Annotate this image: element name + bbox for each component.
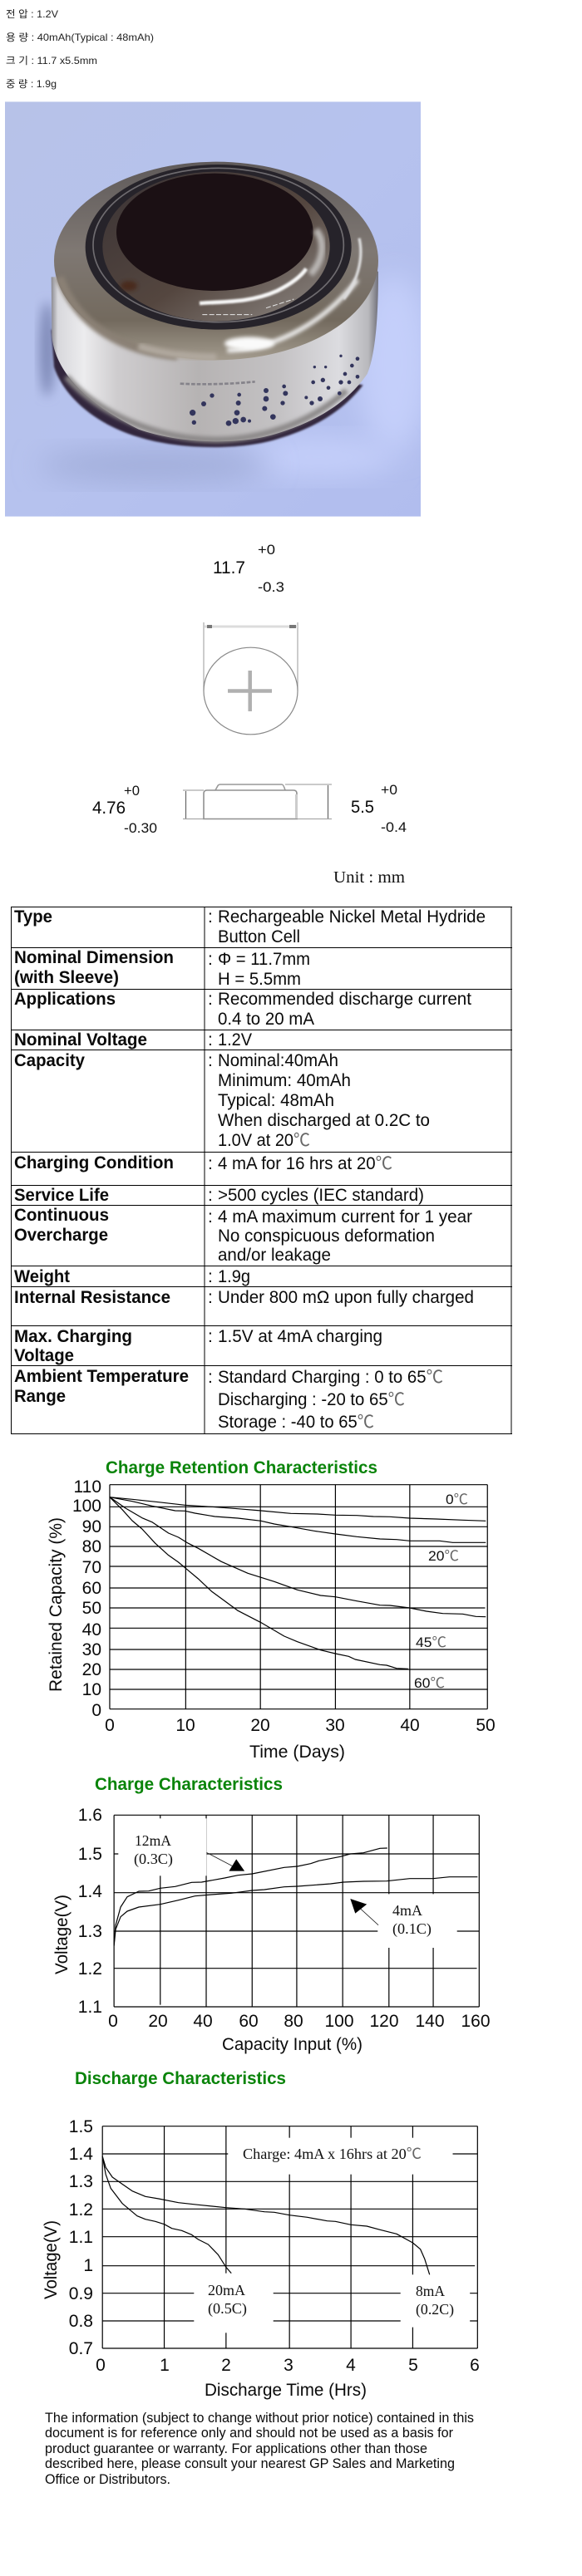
curve label: 8mA: (0.2C) — [416, 2301, 454, 2318]
drawing: side view — [183, 784, 332, 819]
curve label: 12mA: 12mA — [135, 1832, 171, 1849]
curve label: 4mA — [392, 1902, 432, 1938]
y axis ticks — [72, 1477, 101, 1720]
y axis ticks: 40 — [82, 1620, 101, 1639]
spec: weight: 중 량 : 1.9g — [6, 78, 57, 90]
row: applications: : — [208, 990, 213, 1009]
y axis ticks: 0.9 — [69, 2284, 93, 2303]
x axis ticks: 0 — [96, 2356, 106, 2375]
heading: charge characteristics: Charge Characteristics — [95, 1775, 283, 1794]
curve labels: 60℃ — [414, 1675, 445, 1691]
row: applications: Recommended discharge current — [218, 990, 471, 1009]
disclaimer text: The information (subject to change without prior notice) contained in this — [45, 2410, 474, 2426]
curve label: 4mA: 4mA — [392, 1902, 422, 1919]
y axis ticks — [78, 1806, 102, 2017]
text block: key specifications — [6, 8, 154, 90]
row: capacity: : — [208, 1051, 213, 1070]
y axis ticks: 1.1 — [69, 2228, 93, 2247]
row: capacity: Minimum: 40mAh — [218, 1071, 351, 1090]
x axis ticks: 1 — [160, 2356, 170, 2375]
x axis ticks: 80 — [284, 2012, 303, 2031]
row: continuous overcharge: Continuous — [14, 1206, 109, 1225]
chart: discharge characteristics — [42, 2117, 480, 2400]
y axis ticks: 1.5 — [78, 1845, 102, 1864]
row: capacity: When discharged at 0.2C to — [218, 1111, 430, 1130]
label: total height 5.5 tolerance: 5.5 — [351, 798, 374, 817]
y axis ticks: 1.1 — [78, 1998, 102, 2017]
row: internal resistance: Internal Resistance — [14, 1288, 170, 1307]
chart: charge characteristics — [52, 1806, 491, 2054]
row: ambient temperature range: Ambient Temperature — [14, 1367, 189, 1386]
x axis ticks: 100 — [324, 2012, 354, 2031]
y axis title: Voltage(V) — [42, 2220, 61, 2299]
y axis ticks: 10 — [82, 1680, 101, 1699]
row: ambient temperature range: Range — [14, 1387, 66, 1406]
row: nominal voltage: : — [208, 1030, 213, 1050]
y axis ticks: 70 — [82, 1558, 101, 1577]
curve label: 20mA — [208, 2282, 247, 2318]
row: weight: 1.9g — [218, 1267, 250, 1286]
row: ambient temperature range: Storage : -40 to 65℃ — [218, 1413, 374, 1432]
row: service life: : — [208, 1186, 213, 1205]
curve label: 20mA: 20mA — [208, 2282, 245, 2298]
row: type — [14, 907, 486, 946]
x axis ticks: 30 — [325, 1716, 345, 1735]
row: service life — [14, 1186, 424, 1205]
x axis ticks: 4 — [346, 2356, 356, 2375]
row: continuous overcharge: Overcharge — [14, 1226, 108, 1245]
y axis ticks — [69, 2117, 93, 2358]
row: internal resistance: : — [208, 1288, 213, 1307]
row: applications — [14, 990, 471, 1029]
y axis ticks: 30 — [82, 1640, 101, 1659]
row: ambient temperature range — [14, 1367, 443, 1432]
label: diameter 11.7 tolerance: +0 — [258, 542, 275, 558]
row: nominal voltage: 1.2V — [218, 1030, 252, 1050]
curve label: 12mA: (0.3C) — [134, 1851, 173, 1868]
row: internal resistance — [14, 1288, 474, 1307]
y axis ticks: 0 — [91, 1701, 101, 1720]
photo detail: dot-matrix marking — [190, 355, 359, 426]
disclaimer text: document is for reference only and should not be used as a basis for — [45, 2425, 453, 2441]
row: nominal dimension: (with Sleeve) — [14, 968, 119, 987]
row: charging condition — [14, 1153, 392, 1173]
curve label: 4mA: (0.1C) — [392, 1920, 432, 1938]
row: nominal dimension: Nominal Dimension — [14, 948, 174, 967]
row: nominal voltage — [14, 1030, 252, 1050]
y axis ticks: 1.3 — [78, 1922, 102, 1941]
row: type: Type — [14, 907, 52, 927]
label: diameter 11.7 tolerance: -0.3 — [258, 579, 284, 595]
note: charge condition: Charge: 4mA x 16hrs at 20℃ — [243, 2146, 422, 2162]
spec: capacity: 용 량 : 40mAh(Typical : 48mAh) — [6, 32, 154, 43]
label: total height 5.5 tolerance: -0.4 — [381, 819, 407, 835]
row: applications: Applications — [14, 990, 116, 1009]
x axis ticks: 5 — [408, 2356, 418, 2375]
diagram: battery dimensions — [92, 542, 407, 887]
label: body height 4.76 tolerance: -0.30 — [124, 820, 157, 836]
x axis title: Capacity Input (%) — [222, 2035, 363, 2054]
row: nominal dimension: H = 5.5mm — [218, 970, 301, 989]
row: max charging voltage: Voltage — [14, 1346, 74, 1365]
row: capacity — [14, 1051, 430, 1150]
heading: charge retention: Charge Retention Characteristics — [106, 1458, 377, 1477]
x axis title: Discharge Time (Hrs) — [205, 2381, 367, 2400]
row: applications: 0.4 to 20 mA — [218, 1010, 314, 1029]
row: type: Rechargeable Nickel Metal Hydride — [218, 907, 486, 927]
y axis ticks: 110 — [74, 1477, 101, 1497]
y axis ticks: 1.5 — [69, 2117, 93, 2136]
row: nominal dimension: : — [208, 950, 213, 969]
spec: voltage: 전 압 : 1.2V — [6, 8, 58, 20]
row: type: : — [208, 907, 213, 927]
label: body height 4.76 tolerance: +0 — [124, 783, 140, 799]
y axis title: Voltage(V) — [52, 1895, 72, 1974]
y axis ticks: 1.4 — [78, 1882, 102, 1901]
arrow: 4mA — [350, 1899, 378, 1925]
y axis ticks: 90 — [82, 1517, 101, 1536]
row: weight: Weight — [14, 1267, 70, 1286]
y axis ticks: 0.7 — [69, 2339, 93, 2358]
y axis ticks: 20 — [82, 1660, 101, 1679]
disclaimer text: described here, please consult your nearest GP Sales and Marketing — [45, 2456, 455, 2471]
row: capacity: 1.0V at 20℃ — [218, 1131, 310, 1150]
chart: charge retention — [47, 1477, 496, 1762]
row: charging condition: Charging Condition — [14, 1153, 174, 1172]
row: continuous overcharge — [14, 1206, 472, 1265]
x axis ticks — [96, 2356, 480, 2375]
y axis ticks: 80 — [82, 1537, 101, 1556]
x axis ticks — [105, 1716, 496, 1735]
row: max charging voltage: : — [208, 1327, 213, 1346]
row: ambient temperature range: Standard Charging : 0 to 65℃ — [218, 1368, 443, 1387]
label: body height 4.76 tolerance — [92, 783, 157, 836]
row: ambient temperature range: : — [208, 1368, 213, 1387]
x axis ticks: 6 — [470, 2356, 480, 2375]
label: body height 4.76 tolerance: 4.76 — [92, 799, 126, 818]
x axis ticks: 60 — [239, 2012, 259, 2031]
label: unit: Unit : mm — [333, 868, 405, 887]
row: charging condition: : — [208, 1154, 213, 1173]
x axis ticks: 40 — [193, 2012, 213, 2031]
x axis ticks: 3 — [284, 2356, 293, 2375]
plot: retention curves — [110, 1485, 487, 1709]
row: capacity: Nominal:40mAh — [218, 1051, 338, 1070]
row: continuous overcharge: and/or leakage — [218, 1246, 331, 1265]
label: diameter 11.7 tolerance: 11.7 — [213, 558, 245, 578]
curve label: 8mA — [416, 2283, 454, 2318]
curve labels — [414, 1492, 468, 1691]
y axis ticks: 100 — [72, 1497, 101, 1516]
x axis ticks: 0 — [105, 1716, 115, 1735]
heading: discharge characteristics: Discharge Characteristics — [75, 2069, 286, 2088]
disclaimer text — [45, 2410, 474, 2487]
plot: discharge curves — [102, 2126, 477, 2348]
label: diameter 11.7 tolerance — [213, 542, 284, 595]
row: charging condition: 4 mA for 16 hrs at 20℃ — [218, 1154, 392, 1173]
curve label: 12mA — [134, 1832, 173, 1868]
x axis ticks: 50 — [476, 1716, 496, 1735]
curve labels: 0℃ — [446, 1492, 468, 1507]
x axis title: Time (Days) — [249, 1743, 345, 1762]
y axis ticks: 1 — [83, 2256, 93, 2275]
row: weight — [14, 1267, 250, 1286]
row: continuous overcharge: No conspicuous deformation — [218, 1227, 435, 1246]
y axis title: Retained Capacity (%) — [47, 1517, 66, 1692]
row: capacity: Typical: 48mAh — [218, 1091, 334, 1110]
x axis ticks: 2 — [221, 2356, 231, 2375]
y axis ticks: 50 — [82, 1599, 101, 1618]
plot: charge curves — [114, 1815, 479, 2007]
row: nominal dimension: Φ = 11.7mm — [218, 950, 310, 969]
y axis ticks: 1.2 — [78, 1959, 102, 1979]
row: service life: Service Life — [14, 1186, 109, 1205]
row: ambient temperature range: Discharging : -20 to 65℃ — [218, 1390, 405, 1409]
x axis ticks: 10 — [175, 1716, 195, 1735]
x axis ticks: 140 — [415, 2012, 445, 2031]
row: nominal dimension — [14, 948, 310, 989]
row: continuous overcharge: : — [208, 1207, 213, 1227]
row: weight: : — [208, 1267, 213, 1286]
x axis ticks: 20 — [250, 1716, 270, 1735]
drawing: top view — [204, 622, 298, 735]
curve label: 20mA: (0.5C) — [208, 2300, 247, 2318]
row: capacity: Capacity — [14, 1051, 85, 1070]
row: type: Button Cell — [218, 927, 300, 946]
arrow: 12mA — [206, 1852, 244, 1871]
row: service life: >500 cycles (IEC standard) — [218, 1186, 424, 1205]
y axis ticks: 0.8 — [69, 2312, 93, 2331]
x axis ticks: 20 — [148, 2012, 168, 2031]
x axis ticks: 0 — [108, 2012, 118, 2031]
x axis ticks: 40 — [400, 1716, 420, 1735]
y axis ticks: 1.6 — [78, 1806, 102, 1825]
x axis ticks: 120 — [369, 2012, 399, 2031]
row: nominal voltage: Nominal Voltage — [14, 1030, 147, 1050]
curve labels: 45℃ — [416, 1635, 446, 1650]
curve labels: 20℃ — [428, 1548, 459, 1564]
x axis ticks — [108, 2012, 491, 2031]
y axis ticks: 60 — [82, 1579, 101, 1598]
y axis ticks: 1.2 — [69, 2200, 93, 2220]
row: max charging voltage — [14, 1327, 382, 1365]
x axis ticks: 160 — [461, 2012, 491, 2031]
row: max charging voltage: 1.5V at 4mA charging — [218, 1327, 382, 1346]
label: total height 5.5 tolerance: +0 — [381, 782, 397, 798]
y axis ticks: 1.4 — [69, 2145, 93, 2164]
photo: button cell battery — [5, 101, 430, 517]
label: total height 5.5 tolerance — [351, 782, 407, 835]
disclaimer text: Office or Distributors. — [45, 2471, 170, 2487]
y axis ticks: 1.3 — [69, 2172, 93, 2191]
row: continuous overcharge: 4 mA maximum current for 1 year — [218, 1207, 472, 1227]
spec: size: 크 기 : 11.7 x5.5mm — [6, 55, 97, 66]
table: specifications — [11, 907, 512, 1434]
curve label: 8mA: 8mA — [416, 2283, 445, 2299]
row: internal resistance: Under 800 mΩ upon fully charged — [218, 1288, 474, 1307]
row: max charging voltage: Max. Charging — [14, 1327, 132, 1346]
disclaimer text: product guarantee or warranty. For applications other than those — [45, 2441, 427, 2456]
